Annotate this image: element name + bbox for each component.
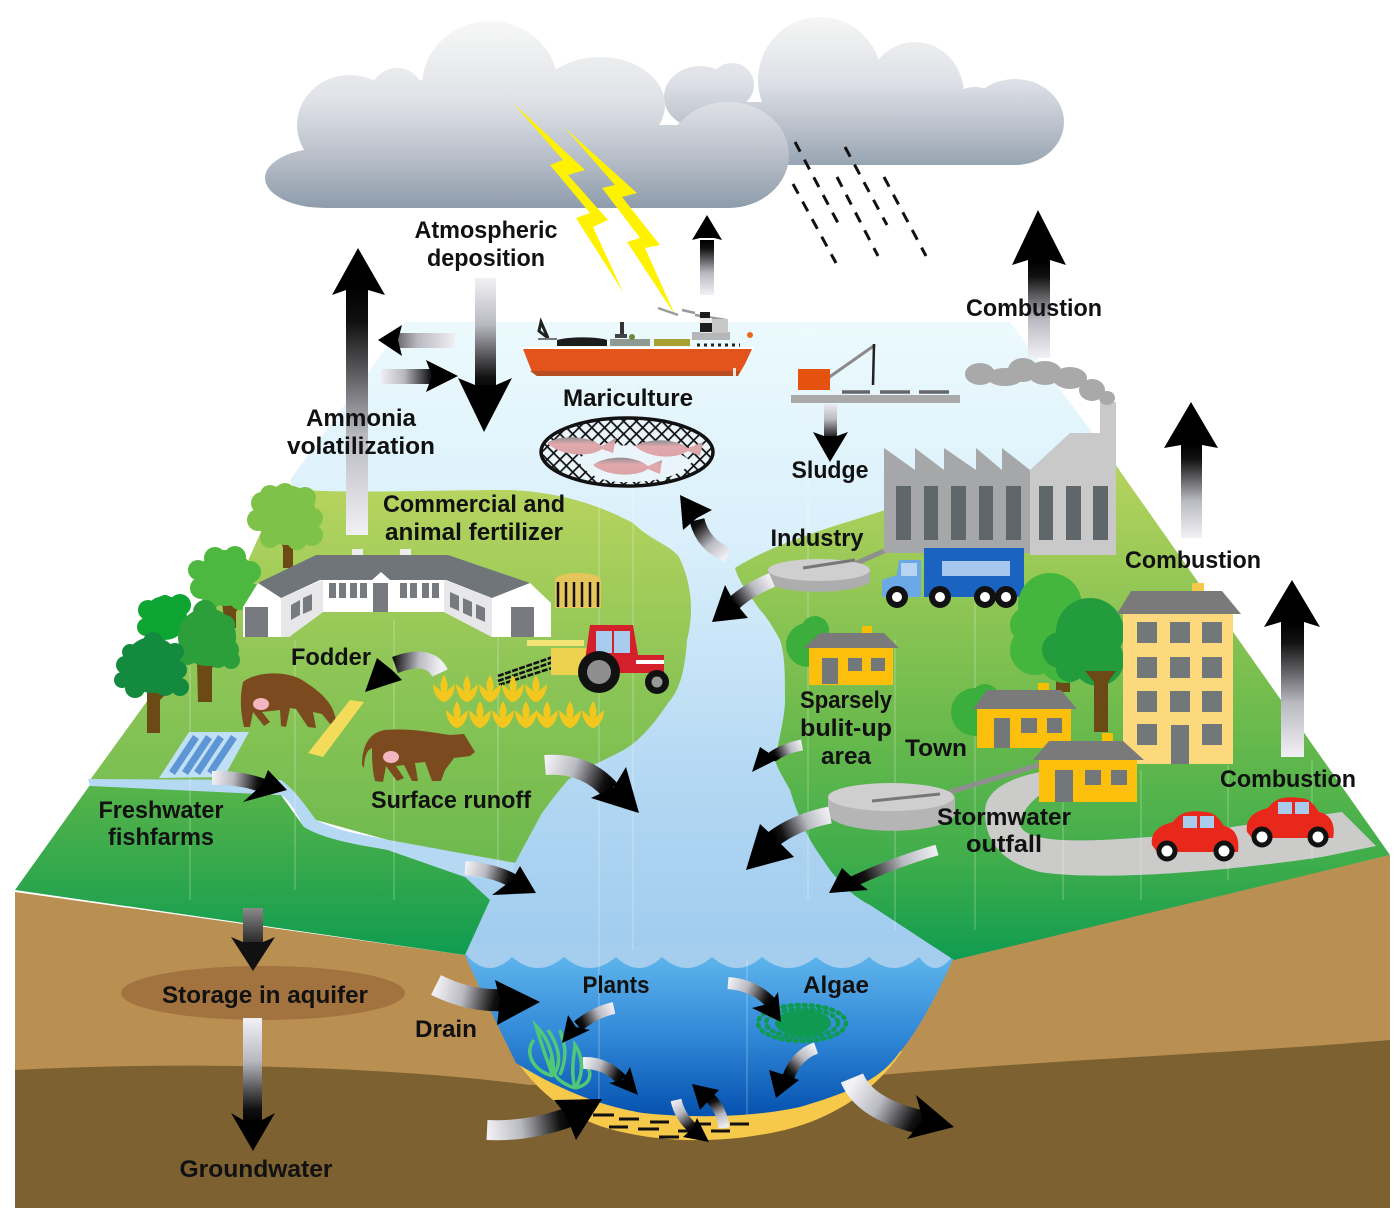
label: Sparsely bulit-up area: bulit-up bbox=[800, 715, 892, 742]
crops bbox=[433, 675, 604, 728]
arrow: into sediment bbox=[676, 1100, 709, 1142]
water surface scallops bbox=[466, 945, 953, 968]
tree bbox=[114, 632, 189, 733]
label: Freshwater fishfarms: Freshwater bbox=[98, 797, 224, 824]
arrow: plants to sediment bbox=[583, 1063, 638, 1095]
label: Groundwater: Groundwater bbox=[180, 1156, 332, 1183]
arrow: to plants bbox=[562, 1008, 614, 1043]
arrow: left to ammonia bbox=[378, 325, 455, 356]
arrow: out of sediment bbox=[692, 1084, 724, 1128]
arrow: surface runoff bbox=[545, 765, 639, 813]
stream bbox=[88, 779, 515, 880]
arrow: industry to river bbox=[712, 580, 772, 622]
label: Ammonia volatilization: volatilization bbox=[287, 433, 435, 460]
bridge bbox=[692, 332, 730, 340]
roof bbox=[258, 555, 530, 598]
hull bbox=[523, 349, 752, 376]
label: Freshwater fishfarms: fishfarms bbox=[108, 824, 214, 851]
label: Stormwater outfall: outfall bbox=[966, 831, 1042, 858]
label: Commercial and animal fertilizer: animal fertilizer bbox=[385, 519, 563, 546]
arrow: lake outflow to ground bbox=[852, 1078, 954, 1139]
rain bbox=[793, 142, 926, 263]
light hall bbox=[1030, 433, 1116, 555]
arrow: drain to lake bbox=[436, 980, 540, 1025]
tree bbox=[247, 483, 323, 568]
label: Ammonia volatilization: Ammonia bbox=[306, 405, 417, 432]
arrow: stream to river bbox=[465, 866, 536, 895]
arrow: combustion from factory bbox=[1012, 210, 1066, 358]
chimney bbox=[1100, 402, 1116, 437]
smoke bbox=[965, 358, 1115, 405]
label: Combustion (factory): Combustion bbox=[966, 295, 1102, 322]
clear centre of net bbox=[578, 445, 692, 482]
label: Sparsely bulit-up area: area bbox=[821, 743, 872, 770]
arrow: sludge down bbox=[813, 404, 848, 462]
arrow: river to net bbox=[680, 495, 728, 555]
freshwater fish farm pond bbox=[159, 732, 249, 778]
arrow: atmospheric deposition down bbox=[458, 278, 512, 432]
label: Commercial and animal fertilizer bbox=[383, 491, 565, 546]
arrow: stormwater tank to river bbox=[746, 815, 830, 870]
label: Algae: Algae bbox=[803, 972, 869, 999]
label: Atmospheric deposition: Atmospheric bbox=[414, 217, 558, 244]
label: Sparsely bulit-up area: Sparsely bbox=[800, 687, 893, 714]
crane barge bbox=[791, 344, 960, 403]
ship bbox=[522, 308, 754, 376]
sediment layer bbox=[516, 1040, 902, 1140]
windows bbox=[291, 583, 485, 622]
label: Sparsely bulit-up area bbox=[800, 687, 893, 770]
label: Drain: Drain bbox=[415, 1016, 477, 1043]
label: Mariculture: Mariculture bbox=[563, 385, 693, 412]
label: Fodder: Fodder bbox=[291, 644, 371, 671]
cloud: left bbox=[265, 21, 789, 208]
cow: grazing bbox=[241, 673, 337, 728]
arrow: groundwater inflow bbox=[487, 1099, 602, 1140]
aquifer bbox=[121, 966, 405, 1020]
factory bbox=[884, 402, 1116, 555]
truck bbox=[882, 548, 1024, 605]
road bbox=[985, 772, 1376, 876]
lake water bbox=[465, 955, 954, 1116]
label: Combustion (cars): Combustion bbox=[1220, 766, 1356, 793]
doors bbox=[245, 583, 534, 637]
silo bbox=[555, 573, 601, 608]
left land: farmland bbox=[90, 487, 691, 863]
feed trough bbox=[308, 700, 364, 757]
walls bbox=[243, 570, 551, 637]
trees: town bbox=[1010, 573, 1124, 732]
farm building bbox=[243, 549, 551, 637]
lightning bolts bbox=[513, 103, 675, 315]
fish bbox=[547, 437, 703, 475]
arrow: right to deposition bbox=[381, 360, 458, 392]
label: Stormwater outfall: Stormwater bbox=[937, 804, 1071, 831]
deck stripe bbox=[522, 347, 754, 350]
label: Industry: Industry bbox=[770, 525, 864, 552]
lake bbox=[465, 945, 954, 1140]
label: Stormwater outfall bbox=[937, 804, 1071, 858]
tree bbox=[137, 594, 240, 702]
label: Plants: Plants bbox=[582, 972, 650, 999]
algae bbox=[758, 1005, 846, 1041]
arrow: algae to sediment bbox=[769, 1048, 816, 1098]
arrow: ammonia volatilization up bbox=[332, 248, 385, 535]
house: town bbox=[951, 683, 1077, 748]
house: stormwater bbox=[1033, 733, 1144, 802]
label: Ammonia volatilization bbox=[287, 405, 435, 460]
label: Surface runoff: Surface runoff bbox=[371, 787, 532, 814]
house: sparsely built-up bbox=[786, 616, 899, 685]
settling tank: industry bbox=[768, 551, 884, 592]
soil cross-section bbox=[15, 855, 1390, 1208]
label: Atmospheric deposition: deposition bbox=[427, 245, 545, 272]
sawtooth hall bbox=[884, 448, 1030, 553]
car bbox=[1152, 811, 1238, 859]
left land: lower meadow bbox=[15, 785, 490, 955]
arrow: to aquifer bbox=[231, 908, 275, 971]
plants bbox=[530, 1026, 590, 1088]
label: Freshwater fishfarms bbox=[98, 797, 224, 851]
label: Sludge: Sludge bbox=[792, 457, 868, 484]
label: Storage in aquifer: Storage in aquifer bbox=[162, 982, 368, 1009]
cloud: right bbox=[664, 17, 1064, 165]
arrow: ship emission up bbox=[692, 215, 722, 295]
label: Atmospheric deposition bbox=[414, 217, 558, 272]
arrow: to algae bbox=[728, 983, 781, 1022]
label: Commercial and animal fertilizer: Commercial and bbox=[383, 491, 565, 518]
cow: standing bbox=[362, 729, 475, 782]
trees: farm bbox=[114, 483, 323, 733]
tractor bbox=[498, 625, 669, 694]
arrow: crops to fodder bbox=[365, 658, 440, 692]
arrow: combustion from cars bbox=[1264, 580, 1320, 757]
car bbox=[1247, 797, 1334, 845]
apartment building bbox=[1117, 583, 1241, 764]
sediment dashes bbox=[593, 1115, 749, 1137]
arrow: land runoff to river bbox=[829, 850, 937, 893]
smoke trails bbox=[658, 308, 726, 320]
settling tank: stormwater bbox=[828, 764, 1042, 831]
label: Town: Town bbox=[905, 735, 967, 762]
arrow: to groundwater bbox=[231, 1018, 275, 1151]
deck cargo bbox=[557, 337, 607, 346]
arrow: sparsely built-up to river bbox=[752, 745, 802, 772]
right land bbox=[735, 464, 1390, 960]
windows bbox=[896, 486, 1108, 540]
arrow: combustion from town bbox=[1164, 402, 1218, 538]
fish net bbox=[541, 418, 713, 486]
arrow: fish farm to stream bbox=[212, 770, 287, 802]
tree bbox=[188, 546, 265, 628]
label: Combustion (town): Combustion bbox=[1125, 547, 1261, 574]
water plane and river bbox=[290, 322, 1120, 960]
